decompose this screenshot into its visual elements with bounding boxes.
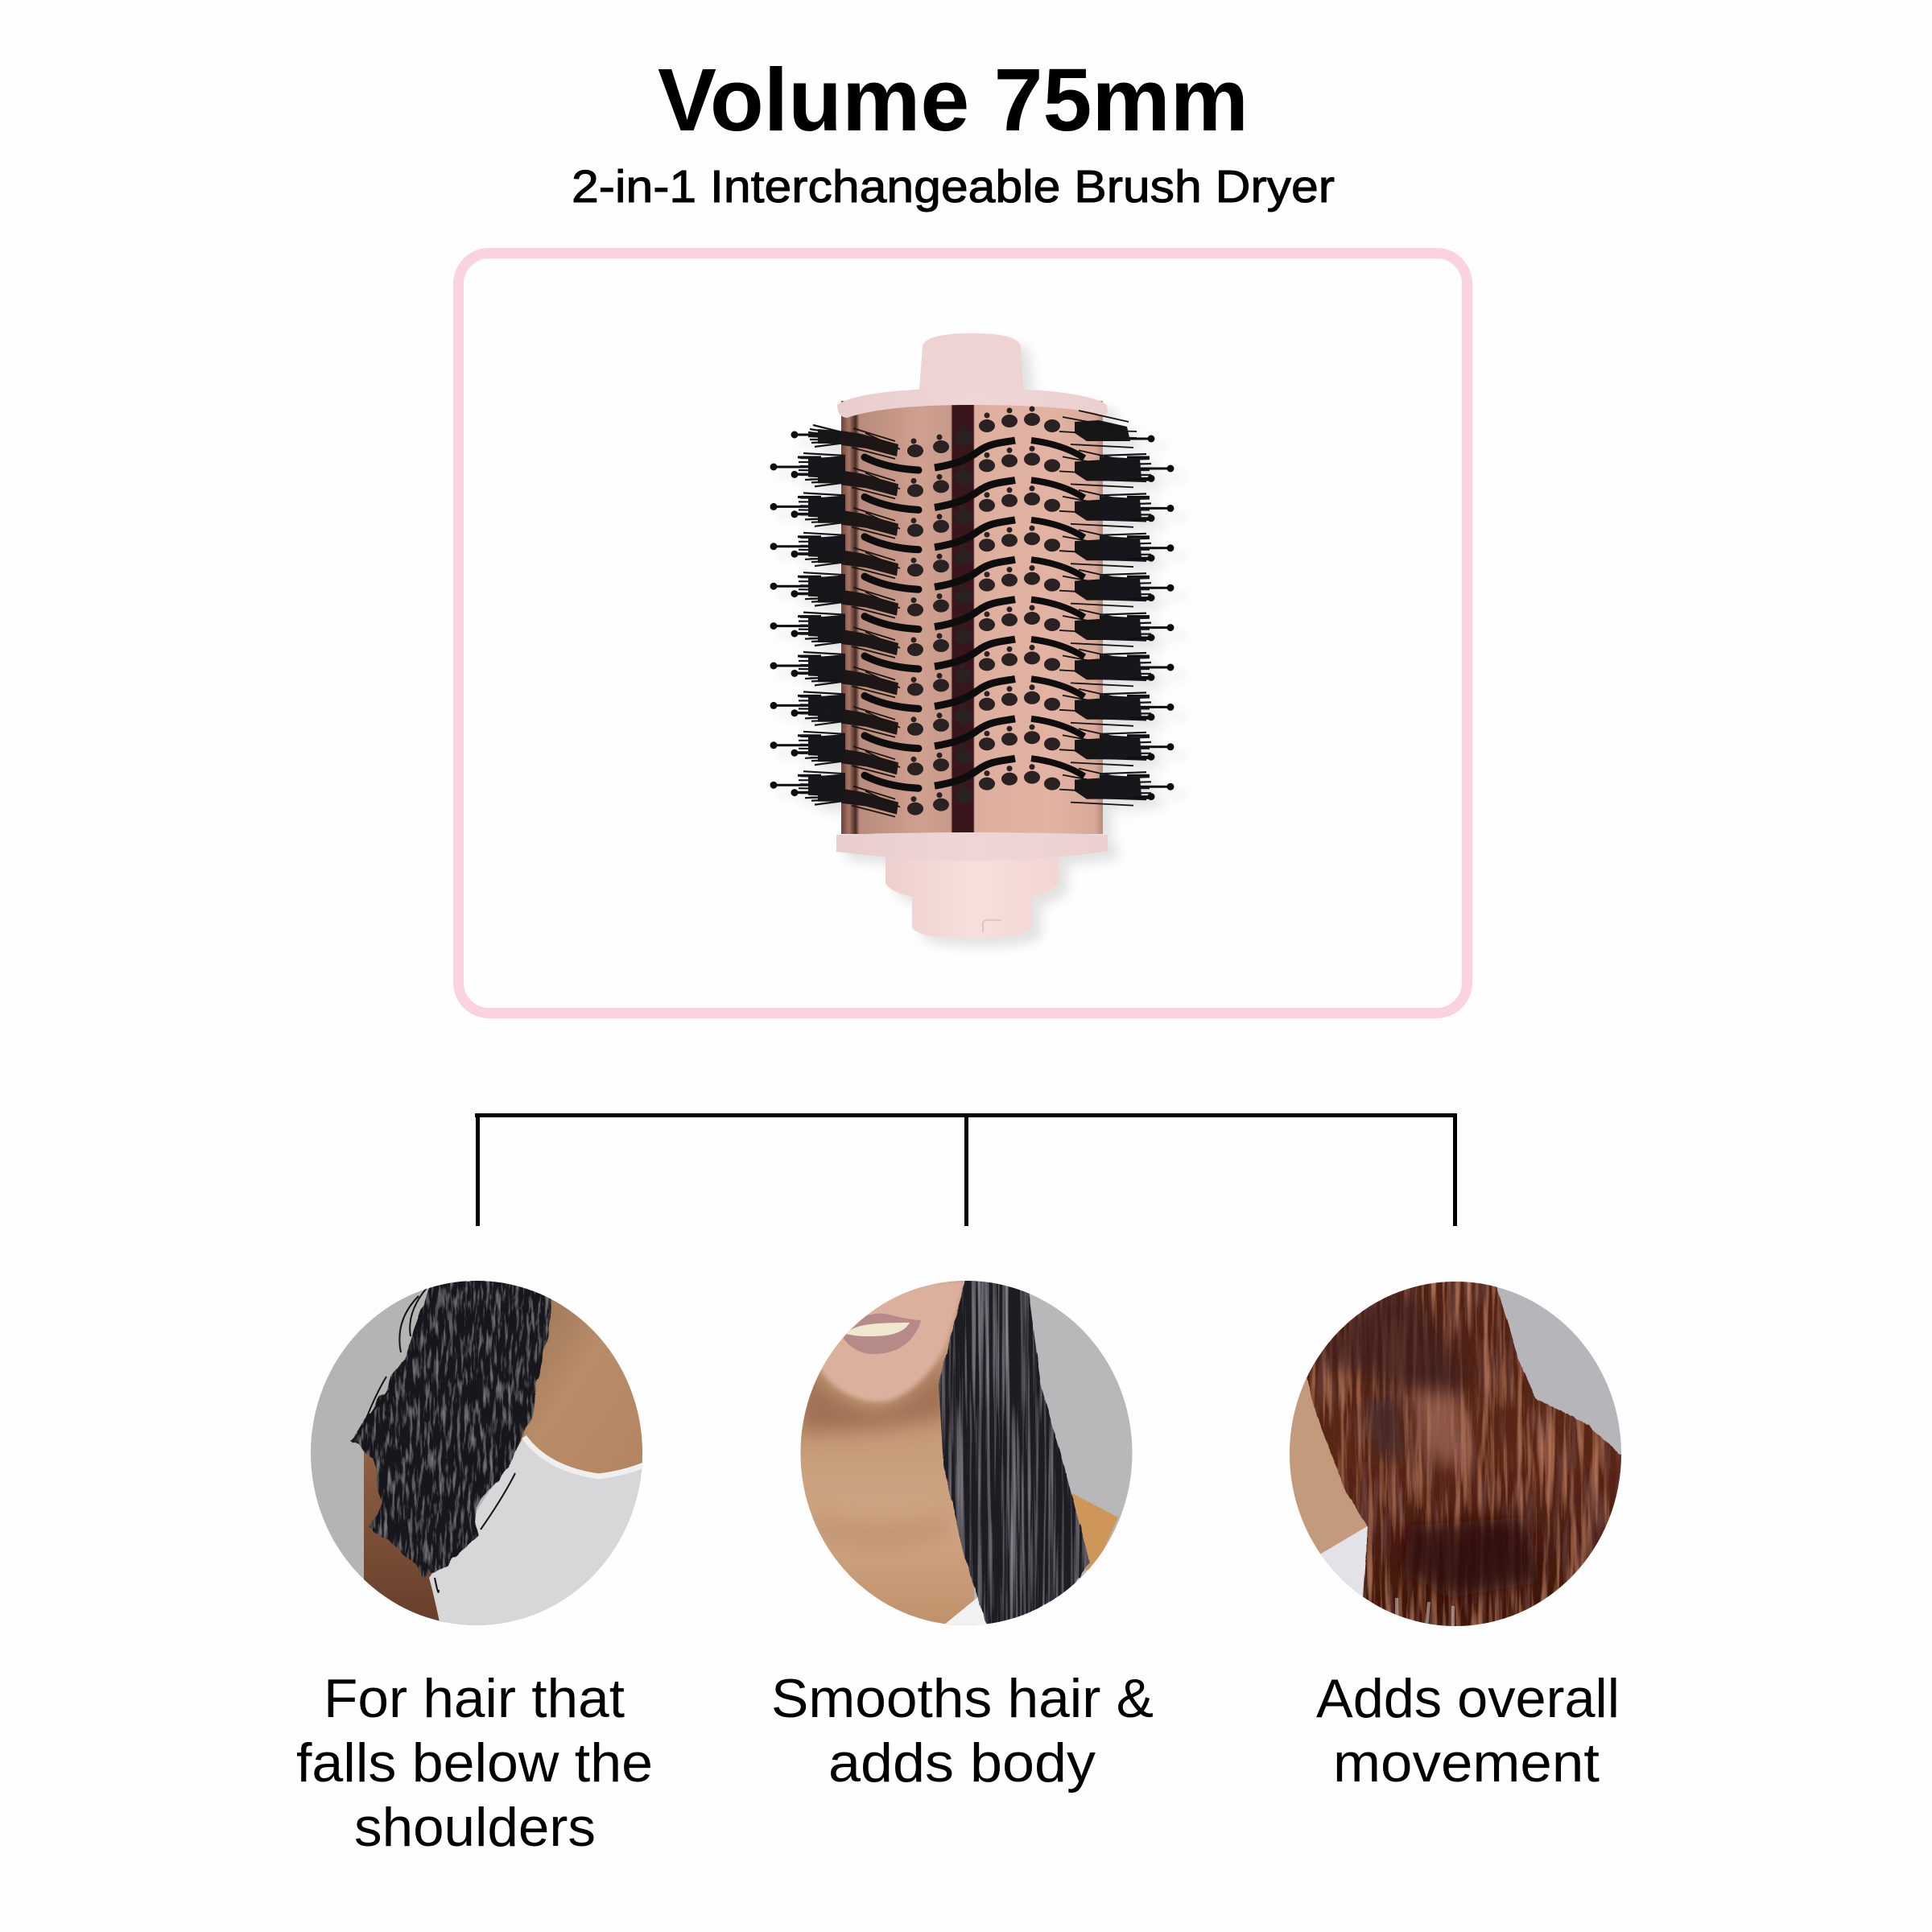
light gaps near hem [1397, 1598, 1453, 1628]
tank top [429, 1437, 644, 1630]
lips [842, 1314, 921, 1354]
caption: for hair that falls below the shoulders [296, 1668, 653, 1858]
brush top knob [919, 333, 1024, 390]
jaw shadow [797, 1352, 950, 1433]
brush bottom ring [836, 832, 1108, 861]
neck and chest skin [797, 1281, 974, 1630]
auburn hair mass [1293, 1276, 1624, 1633]
stray hair wisps [353, 1288, 515, 1592]
straight dark hair [939, 1278, 1090, 1628]
connector bracket [475, 1113, 1457, 1226]
caption: for hair that falls below the shoulders: For hair that [324, 1668, 625, 1729]
panel: product frame [459, 253, 1467, 1013]
dark curly hair [352, 1278, 551, 1575]
brush barrel [841, 401, 1103, 834]
dark shadow patch [1364, 1393, 1405, 1457]
bottom dark curl [1405, 1517, 1542, 1598]
caption: adds overall movement: Adds overall [1316, 1668, 1620, 1729]
subtitle: 2-in-1 Interchangeable Brush Dryer [572, 161, 1335, 213]
skin: arm [364, 1407, 444, 1622]
darker crown [1316, 1288, 1473, 1401]
caption: smooths hair and adds body: adds body [828, 1732, 1096, 1794]
photo: straight dark hair and smile [797, 1278, 1133, 1630]
white top [945, 1597, 987, 1625]
caption: for hair that falls below the shoulders: falls below the [296, 1732, 653, 1794]
photo: curly long hair [311, 1278, 644, 1630]
brush lower neck [886, 853, 1059, 939]
white top [1317, 1525, 1373, 1610]
skin [1284, 1360, 1368, 1558]
product photo: brush attachment [770, 333, 1174, 939]
brush top cap [837, 388, 1108, 418]
title: Volume 75mm [658, 51, 1249, 150]
photo: wavy auburn hair [1284, 1276, 1624, 1633]
teeth [846, 1323, 910, 1336]
caption: adds overall movement [1316, 1668, 1620, 1794]
neck notch [983, 920, 1001, 932]
shoulder skin [1071, 1493, 1118, 1570]
bristle rows [770, 406, 1174, 817]
light strands highlight [1409, 1389, 1463, 1469]
skin: neck and shoulder [499, 1281, 642, 1489]
caption: adds overall movement: movement [1333, 1732, 1600, 1794]
collarbone shadow [815, 1517, 947, 1544]
caption: smooths hair and adds body [771, 1668, 1154, 1794]
face [815, 1281, 966, 1402]
caption: smooths hair and adds body: Smooths hair & [771, 1668, 1154, 1729]
caption: for hair that falls below the shoulders: shoulders [354, 1797, 596, 1858]
